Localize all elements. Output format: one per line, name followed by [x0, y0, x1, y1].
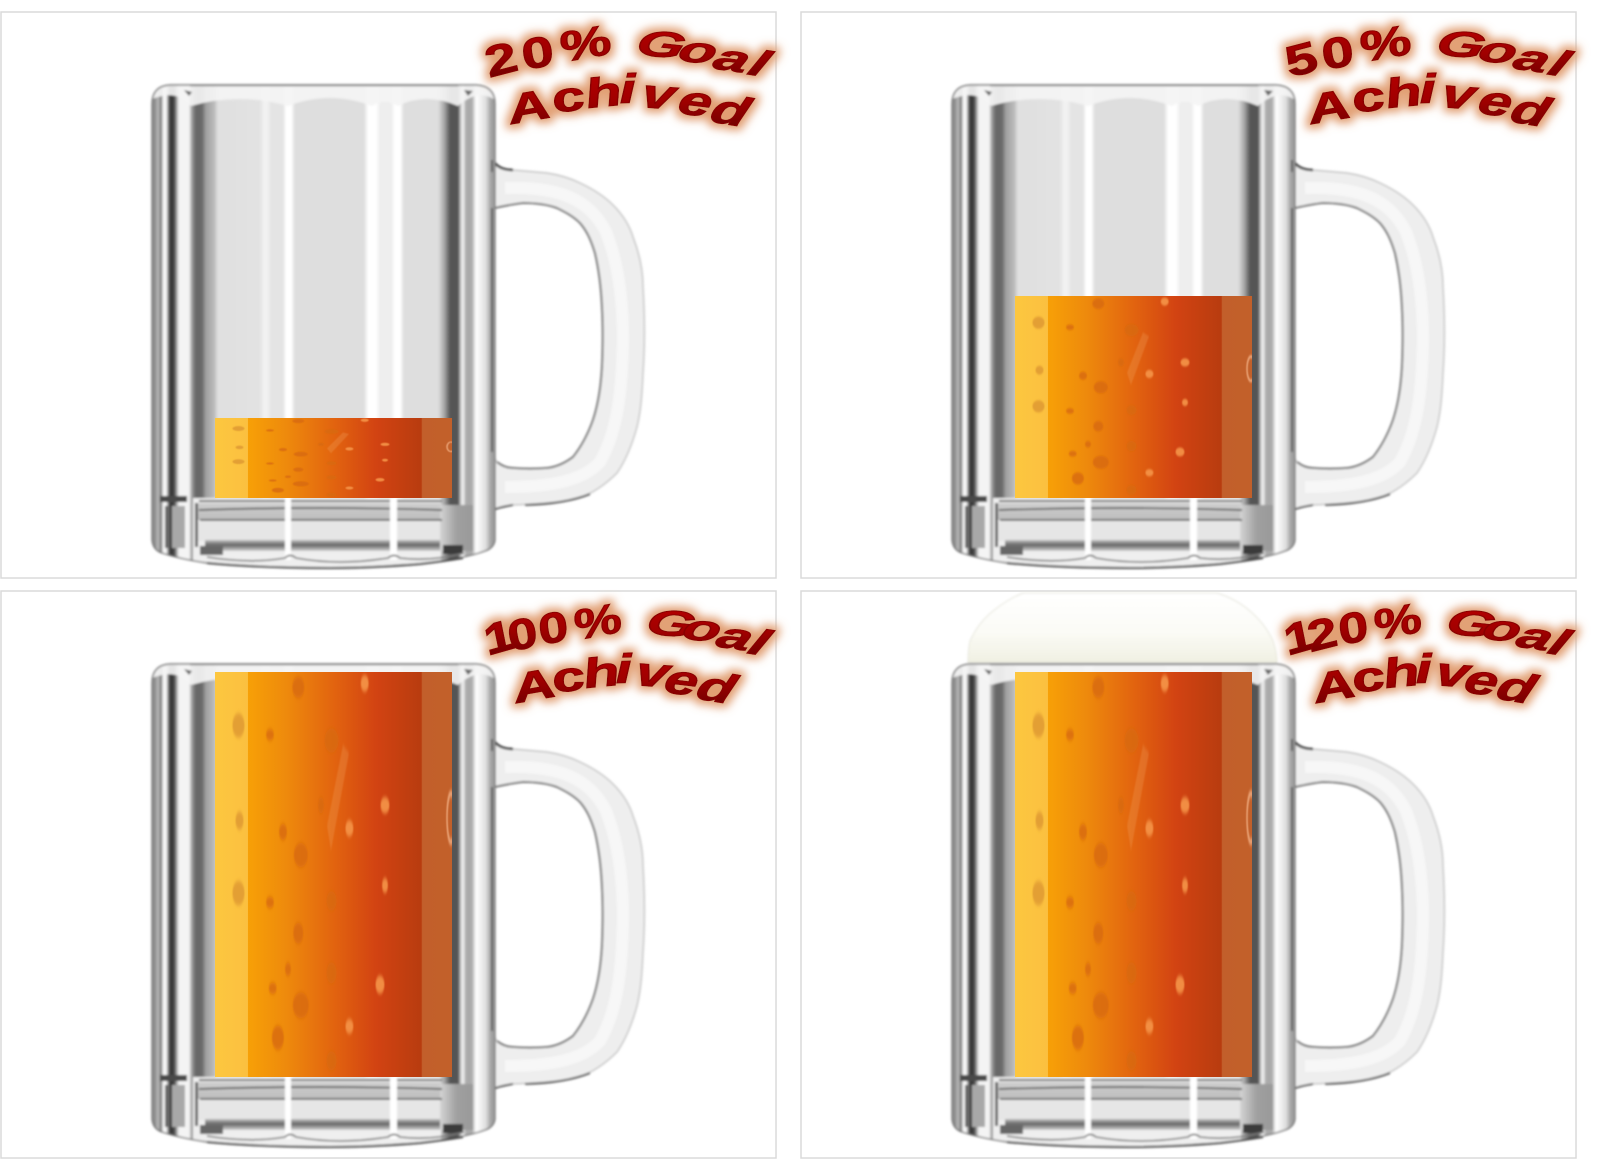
panel: 100% goal	[1, 591, 778, 1158]
heading: 120% Goal Achived: Achived	[1302, 646, 1544, 713]
beer foam	[968, 593, 1277, 663]
heading: 100% Goal Achived: 100%	[473, 595, 628, 664]
glass mug	[150, 84, 644, 572]
heading: 120% Goal Achived: 120%	[1273, 595, 1428, 664]
heading: 50% Goal Achived: Achived	[1297, 66, 1558, 136]
panel frame	[801, 591, 1576, 1158]
beer fill 20%	[215, 418, 452, 498]
panel: 20% goal	[1, 12, 778, 578]
heading: 120% Goal Achived	[1273, 595, 1578, 713]
heading: 50% Goal Achived	[1274, 16, 1578, 136]
glass mug	[150, 663, 644, 1151]
heading: 20% Goal Achived: Goal	[632, 22, 778, 84]
beer fill 120%	[1015, 672, 1252, 1077]
heading: 120% Goal Achived: Goal	[1442, 601, 1578, 663]
panel frame	[1, 12, 776, 578]
heading: 20% Goal Achived: Achived	[497, 66, 758, 136]
heading: 20% Goal Achived	[473, 16, 778, 136]
beer fill 100%	[215, 672, 452, 1077]
heading: 100% Goal Achived: Goal	[642, 601, 778, 663]
glass mug	[950, 663, 1444, 1151]
panel: 50% goal	[801, 12, 1578, 578]
panel frame	[1, 591, 776, 1158]
panel frame	[801, 12, 1576, 578]
heading: 100% Goal Achived	[473, 595, 778, 713]
heading: 50% Goal Achived: Goal	[1432, 22, 1578, 84]
heading: 50% Goal Achived: 50%	[1274, 16, 1418, 85]
heading: 100% Goal Achived: Achived	[502, 646, 744, 713]
heading: 20% Goal Achived: 20%	[473, 16, 618, 86]
beer fill 50%	[1015, 296, 1252, 498]
glass mug	[950, 84, 1444, 572]
panel: 120% goal	[801, 591, 1578, 1158]
